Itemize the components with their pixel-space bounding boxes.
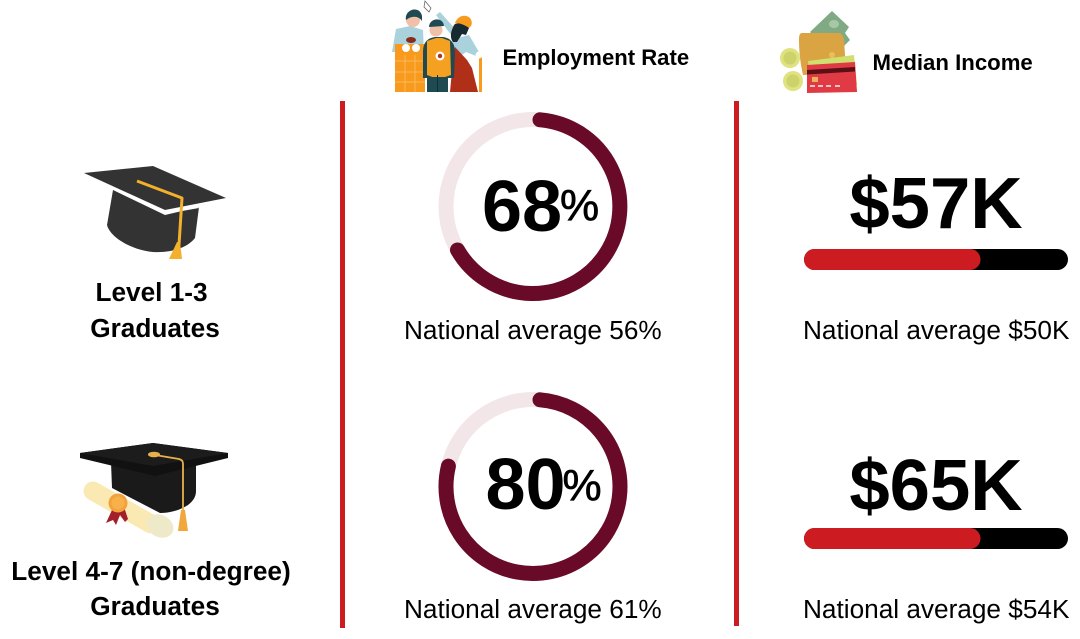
donut chart: 68%: %	[560, 181, 599, 230]
donut chart: 68%	[446, 120, 620, 294]
progress bar: $65K	[804, 528, 1068, 549]
donut chart: 80%: %	[562, 461, 602, 510]
donut chart: 80%	[446, 400, 620, 574]
label: Level 4-7 (non-degree) Graduates: Graduates	[90, 591, 220, 621]
divider: right red line	[734, 101, 739, 626]
icon: graduation cap with diploma	[80, 443, 228, 542]
caption: National average $54K: National average $54K	[803, 594, 1070, 624]
icon: graduation cap	[84, 166, 226, 259]
heading: Employment Rate: Employment Rate	[502, 45, 689, 70]
icon: wallet and cards	[780, 11, 857, 93]
label: Level 1-3 Graduates	[90, 277, 220, 343]
donut chart: 80%: 80	[486, 445, 566, 525]
label: Level 1-3 Graduates: Graduates	[90, 313, 220, 343]
icon: three workers	[392, 1, 482, 92]
caption: National average 56%: National average 56%	[404, 315, 662, 345]
caption: National average $50K: National average $50K	[803, 315, 1070, 345]
heading: Median Income: Median Income	[872, 50, 1033, 75]
donut chart: 68%: 68	[482, 167, 562, 247]
progress bar: $57K	[804, 249, 1068, 270]
label: Level 4-7 (non-degree) Graduates	[11, 556, 291, 621]
income value: $65K: $65K	[849, 445, 1023, 526]
label: Level 1-3 Graduates: Level 1-3	[95, 277, 208, 307]
caption: National average 61%: National average 61%	[404, 594, 662, 624]
label: Level 4-7 (non-degree) Graduates: Level 4-7 (non-degree)	[11, 556, 291, 586]
divider: left red line	[340, 101, 345, 628]
income value: $57K: $57K	[849, 163, 1023, 244]
